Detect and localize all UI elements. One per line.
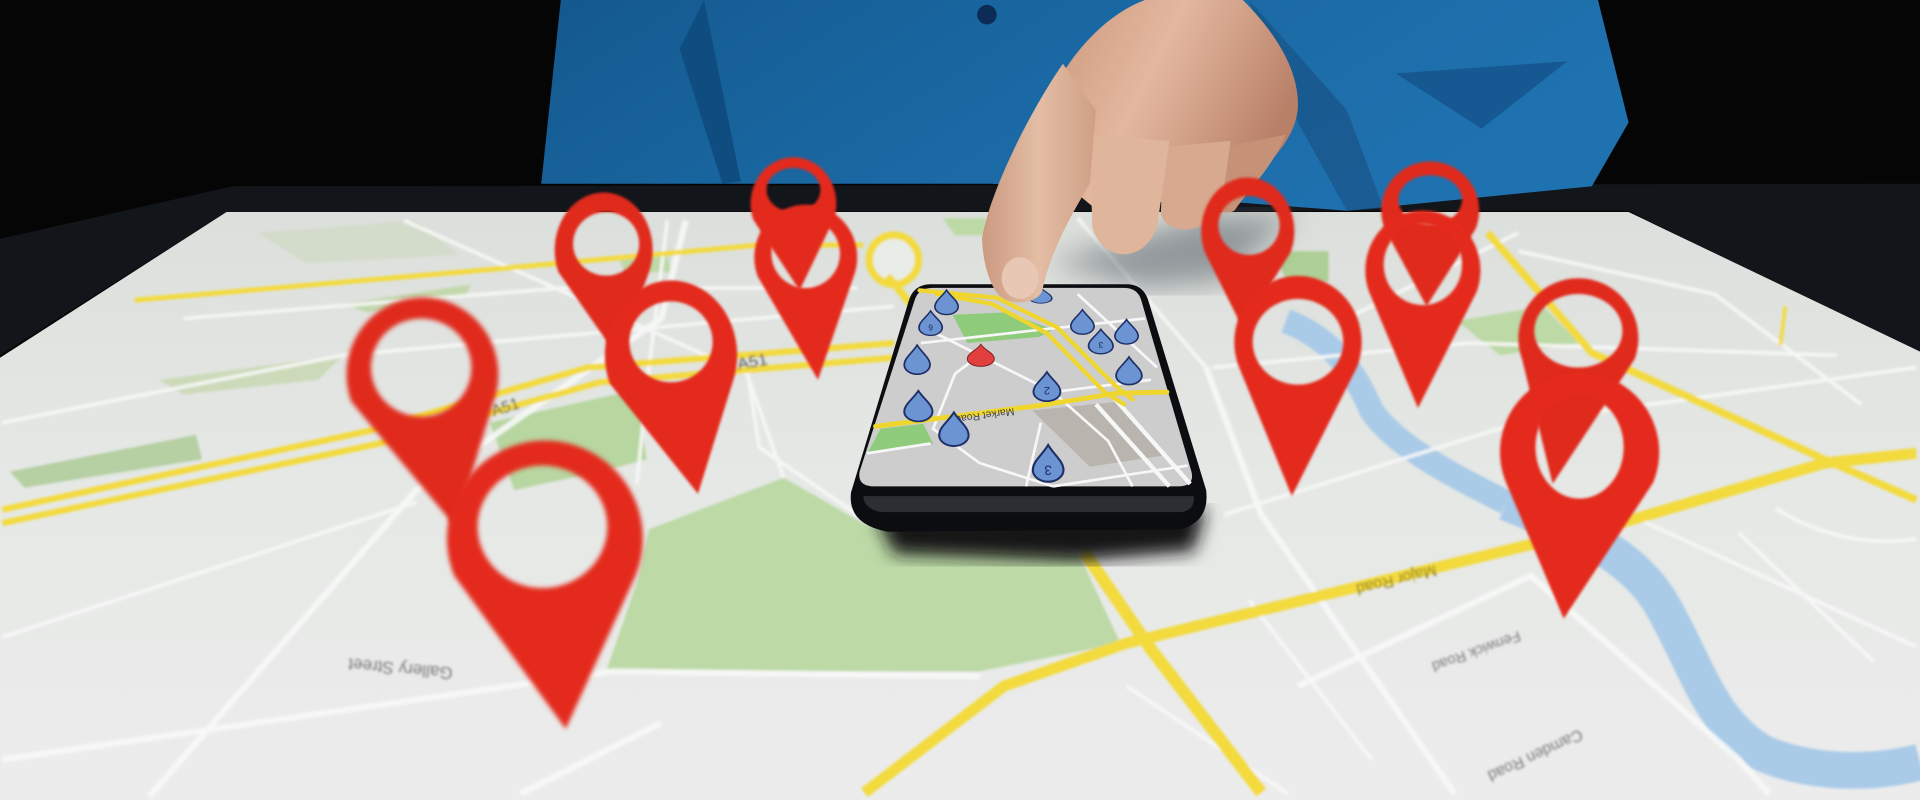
water drop markers: 6 [928,323,933,333]
water drop markers [904,288,1142,482]
red location marker [967,344,994,366]
shirt [541,0,1629,211]
phone shadow [876,508,1206,561]
map: parks [10,218,1580,671]
map artwork [2,218,1920,796]
fingernail [1002,257,1038,299]
map: road labels: Camden Road [1485,725,1585,784]
pin: back far right [1518,278,1638,484]
pin: front right [1365,210,1480,408]
map: yellow main roads [2,233,1916,793]
pin: back right [1381,161,1479,306]
pin: front centre [754,205,857,380]
smartphone [851,284,1207,532]
pin: back right of centre [1201,177,1294,328]
map: road labels: Gallery Street [347,655,453,684]
index finger [982,64,1096,302]
water drop markers: 3 [1098,340,1103,350]
middle finger [1090,135,1169,254]
map: river [1286,321,1920,770]
pin: front far right [1500,372,1659,619]
map: road labels: Major Road [1354,561,1438,597]
screen: parks and plaza [953,312,1053,343]
screen: white streets [867,294,1190,486]
dark table edge [0,184,1920,355]
screen: yellow roads [876,290,1167,426]
phone screen [859,288,1192,486]
screen: road name: Market Road [954,405,1015,424]
pin: front right of centre [1234,276,1362,496]
water drop markers: 3 [1044,463,1052,478]
pin: front far left [447,441,643,729]
phone body [851,284,1207,532]
pin: front left of centre [605,281,737,494]
pin: back far left [347,297,498,527]
pin: back left of centre [555,193,653,358]
little finger [1209,135,1286,213]
map: road labels: A51 [736,349,769,374]
water drop markers: 2 [1044,384,1050,396]
map sheet [0,212,1920,800]
pin: back centre [751,157,836,290]
map: road labels: A51 [489,395,522,420]
map: road labels [347,349,1585,784]
hand pointing [982,0,1298,302]
hand shadow on map [1047,214,1298,288]
ring finger [1161,141,1231,230]
back of hand [1035,0,1298,214]
map: white streets [2,218,1916,796]
map: road labels: Fenwick Road [1430,627,1522,674]
